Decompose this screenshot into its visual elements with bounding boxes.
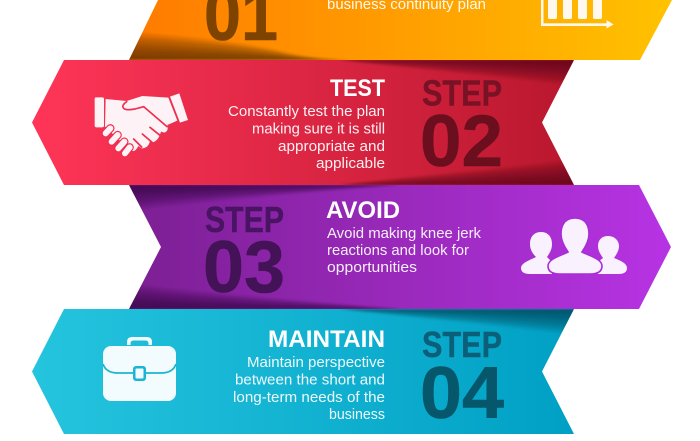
step label 04: 04: [420, 353, 504, 434]
panel: step 03 avoid: [120, 185, 671, 309]
panel: step 01 plan: [120, 0, 672, 60]
step 02 description: making sure it is still: [252, 120, 385, 138]
icon: bar chart: [541, 0, 614, 28]
icon: handshake: [95, 93, 188, 153]
step label 03: STEP: [205, 199, 284, 240]
icon: briefcase: [103, 337, 176, 401]
panel: step 02 test: [32, 60, 580, 185]
step label 02: STEP: [422, 72, 502, 114]
step 03 description: [327, 225, 481, 276]
step 04 description: Maintain perspective: [247, 354, 385, 371]
step 02 description: appropriate and: [278, 138, 385, 155]
step 03 description: opportunities: [327, 259, 417, 276]
heading: test: TEST: [330, 75, 385, 102]
step 02 description: [228, 103, 385, 172]
step 04 description: business: [329, 406, 385, 423]
step 03 description: reactions and look for: [327, 242, 469, 259]
step 02 description: Constantly test the plan: [228, 103, 385, 120]
step 04 description: [233, 354, 385, 423]
step 04 description: long-term needs of the: [233, 389, 385, 406]
step 04 description: between the short and: [235, 372, 385, 388]
step label 02: 02: [420, 101, 503, 182]
step 03 description: Avoid making knee jerk: [327, 225, 481, 242]
icon: people group: [521, 218, 627, 274]
step label 03: 03: [203, 227, 285, 308]
heading: avoid: AVOID: [326, 197, 400, 224]
step 02 description: applicable: [316, 155, 385, 172]
heading: maintain: MAINTAIN: [268, 326, 385, 353]
step label 04: STEP: [422, 324, 502, 365]
panel: step 04 maintain: [32, 309, 580, 434]
